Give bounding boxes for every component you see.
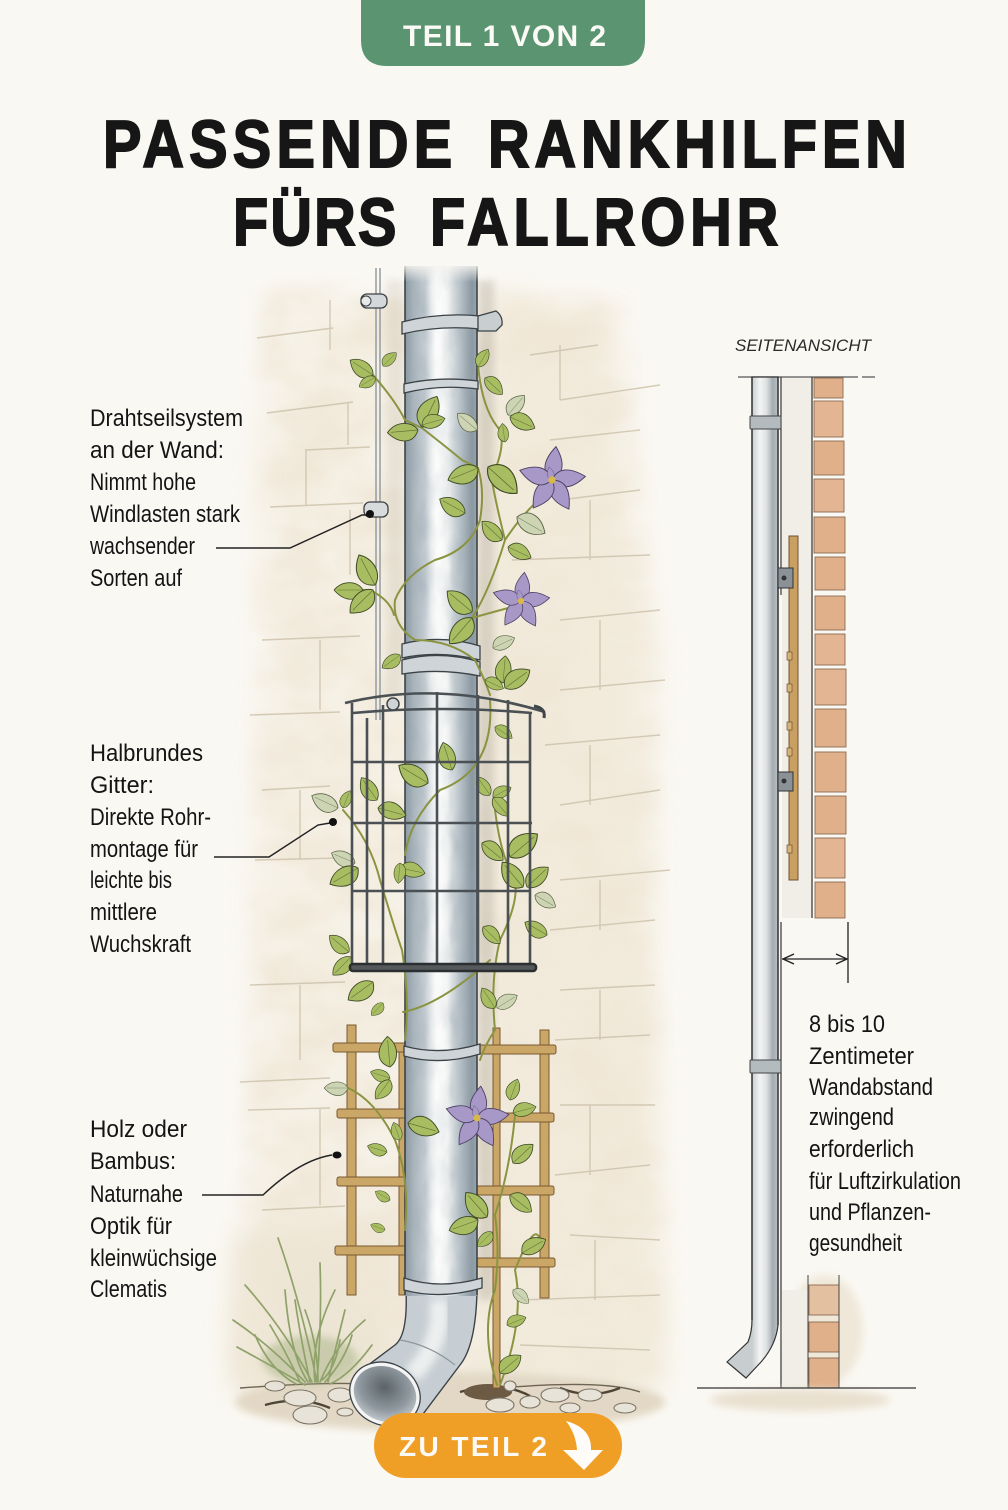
top cut line [738,376,875,378]
elbow collar [400,1340,455,1365]
label: wire rope system: an der Wand: [90,437,224,464]
wooden batten [787,536,798,880]
label: wire rope system: Windlasten stark [90,501,241,528]
side pipe [727,377,781,1378]
title: PASSENDE [103,107,452,182]
label: wire rope system [89,405,243,592]
clematis flowers [444,446,586,1150]
wall bracket middle [364,502,388,517]
label: half-round grid: mittlere [90,899,157,926]
side view drawing [697,336,916,1411]
label: half-round grid: Direkte Rohr- [90,804,211,831]
label: wall distance: Zentimeter [809,1043,914,1070]
pipe shadow on wall [478,280,494,1300]
label: wall distance: gesundheit [809,1230,902,1257]
label: wall distance: zwingend [809,1104,894,1131]
wire rope system [361,268,388,720]
pipe top fade [398,262,488,282]
label: half-round grid: Gitter: [90,772,154,799]
next part button [374,1413,622,1478]
icon: curved down arrow [563,1421,603,1470]
next part button: ZU TEIL 2 [399,1431,547,1462]
side view heading: SEITENANSICHT [735,336,873,355]
clamps [402,315,482,1295]
label: wall distance: erforderlich [809,1136,914,1163]
plaster top [782,378,813,918]
label: wood or bamboo: Clematis [90,1276,167,1303]
grass tuft [233,1238,372,1385]
label: wall distance: für Luftzirkulation [809,1168,961,1195]
label: wire rope system: Drahtseilsystem [90,405,243,432]
pipe shaft [405,266,477,1296]
side brackets [778,568,793,791]
label: half-round grid: leichte bis [90,867,172,894]
bamboo trellis back [333,1025,556,1388]
ground with stones [235,1372,665,1432]
label: wire rope system: wachsender [89,533,195,560]
label: wire rope system: Nimmt hohe [90,469,196,496]
label: wood or bamboo: Holz oder [90,1116,187,1143]
mortar lines [240,300,370,1210]
label: wood or bamboo: kleinwüchsige [90,1245,217,1272]
distance dimension [782,922,848,983]
title: RANKHILFEN [488,107,907,182]
title: FALLROHR [430,185,778,260]
leader line: wire rope [216,510,374,548]
title: FÜRS [233,185,396,260]
half-round wire cage [345,692,545,971]
leader line: grid [214,818,337,857]
clematis stems [343,365,545,1385]
label: wall distance: und Pflanzen- [809,1199,931,1226]
wall bracket top [361,294,387,308]
label: wood or bamboo [90,1116,217,1303]
label: wall distance [809,1011,961,1257]
leader line: bamboo [202,1152,342,1195]
lower wall section [782,1275,863,1388]
label: wood or bamboo: Optik für [90,1213,172,1240]
label: wood or bamboo: Bambus: [90,1148,176,1175]
wire rope [376,268,380,720]
downpipe [339,262,502,1437]
ground line [697,1388,916,1411]
wall face line [781,377,812,1388]
part badge: TEIL 1 VON 2 [403,20,606,53]
label: half-round grid: Wuchskraft [90,931,191,958]
label: wood or bamboo: Naturnahe [90,1181,183,1208]
label: wall distance: 8 bis 10 [809,1011,885,1038]
label: half-round grid [90,740,211,958]
brick wall wash [225,280,670,1395]
label: half-round grid: Halbrundes [90,740,203,767]
pipe elbow [355,1290,477,1418]
part badge [361,0,645,66]
brick column [814,378,846,918]
title [103,107,907,260]
label: half-round grid: montage für [90,836,198,863]
watercolor mottling [235,290,660,1395]
label: wire rope system: Sorten auf [90,565,182,592]
clematis leaves [308,346,559,1378]
outlet opening [342,1353,428,1435]
pipe wall bracket [478,311,502,331]
label: wall distance: Wandabstand [809,1074,933,1101]
